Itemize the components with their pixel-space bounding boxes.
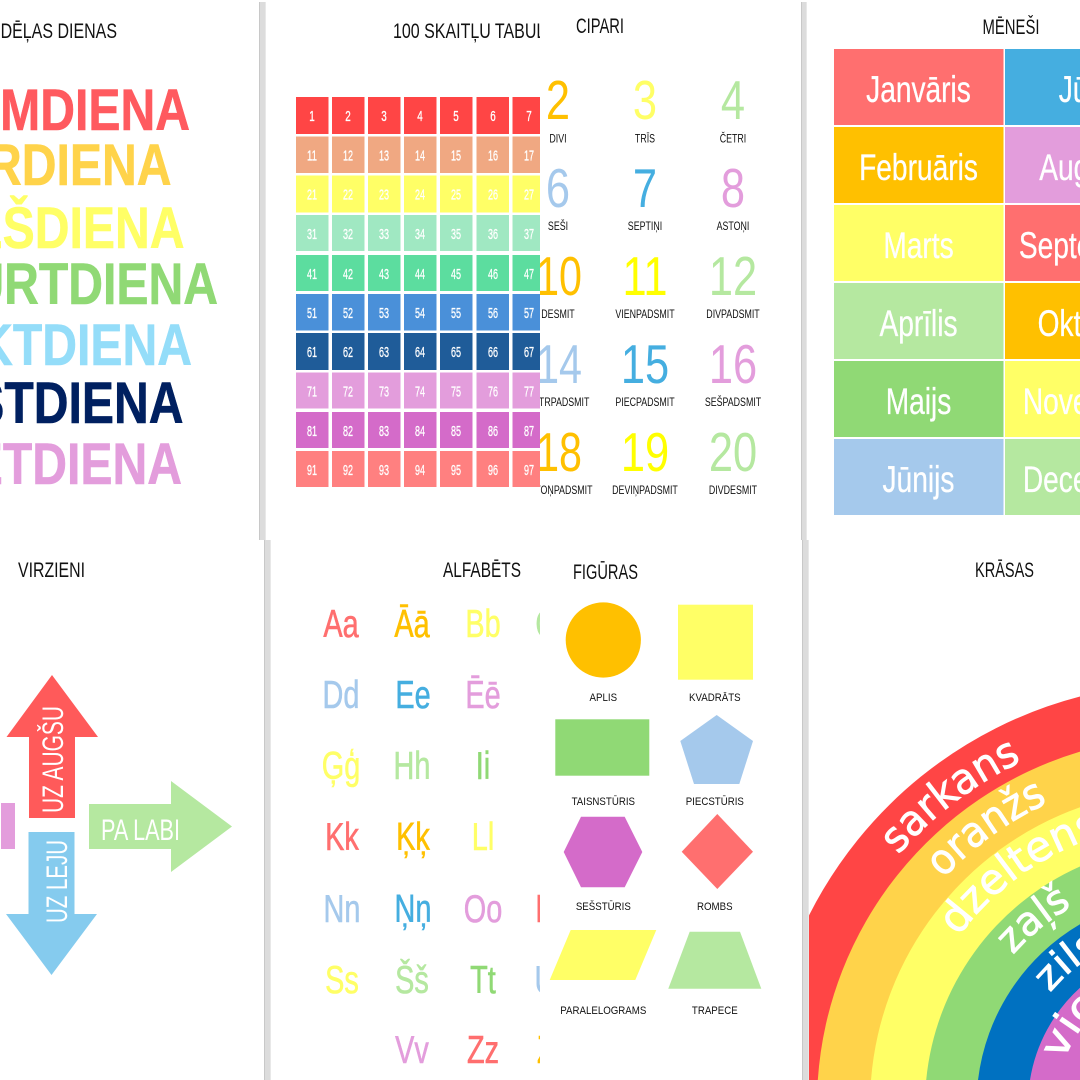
numerals row 2: 8 bbox=[721, 157, 745, 219]
August bbox=[1005, 127, 1080, 203]
letters row 2 bbox=[323, 674, 501, 717]
numerals row 1 bbox=[546, 69, 746, 146]
row 2: 17 bbox=[524, 148, 534, 164]
row 1: 1 bbox=[309, 109, 315, 125]
numerals row 5: 20 bbox=[709, 421, 757, 483]
row 3: 26 bbox=[488, 188, 498, 204]
panel: months bbox=[807, 0, 1080, 540]
letters row 2: Ēē bbox=[465, 674, 501, 717]
letters row 6: Ss bbox=[325, 959, 359, 1002]
numerals row 3: VIENPADSMIT bbox=[615, 309, 675, 321]
numerals row 3: DESMIT bbox=[541, 309, 575, 321]
letters row 1: Aa bbox=[323, 603, 359, 646]
arrow: right: PA LABI bbox=[101, 814, 180, 847]
row 4: 37 bbox=[524, 227, 534, 243]
row 9: 85 bbox=[451, 424, 461, 440]
row 10: 95 bbox=[451, 463, 461, 479]
row 10 bbox=[296, 451, 540, 487]
panel: shapes bbox=[540, 540, 801, 1080]
July bbox=[1005, 49, 1080, 125]
shape: pentagon: PIECSTŪRIS bbox=[686, 795, 744, 808]
arrow: down bbox=[6, 832, 97, 975]
month table bbox=[834, 49, 1080, 515]
row 5: 43 bbox=[379, 267, 389, 283]
row 5: 44 bbox=[415, 267, 425, 283]
row 6: 56 bbox=[488, 306, 498, 322]
numerals row 2: SEŠI bbox=[548, 219, 568, 233]
row 7: 63 bbox=[379, 345, 389, 361]
row 6: 54 bbox=[415, 306, 425, 322]
rainbow bbox=[809, 696, 1080, 1080]
numerals row 5: 19 bbox=[621, 421, 669, 483]
row 9: 86 bbox=[488, 424, 498, 440]
numerals row 1: ČETRI bbox=[720, 131, 746, 146]
row 8: 72 bbox=[343, 384, 353, 400]
row 5 bbox=[296, 255, 540, 291]
letters row 1: Āā bbox=[394, 603, 430, 646]
February: Februāris bbox=[859, 146, 978, 188]
row 10: 92 bbox=[343, 463, 353, 479]
letters row 4: Ll bbox=[472, 816, 494, 859]
row 8: 74 bbox=[415, 384, 425, 400]
label: green: zaļš bbox=[998, 880, 1069, 954]
heading: directions: VIRZIENI bbox=[18, 559, 85, 582]
November bbox=[1005, 361, 1080, 437]
row 4: 31 bbox=[307, 227, 317, 243]
row 4: 36 bbox=[488, 227, 498, 243]
row 6 bbox=[296, 294, 540, 330]
row 10: 91 bbox=[307, 463, 317, 479]
numerals row 3: 12 bbox=[709, 245, 757, 307]
letters row 4: Kk bbox=[325, 816, 360, 859]
panel: alphabet bbox=[271, 540, 540, 1080]
row 6: 51 bbox=[307, 306, 317, 322]
numerals row 1: TRĪS bbox=[635, 132, 655, 146]
shape: trapezoid: TRAPECE bbox=[692, 1004, 738, 1017]
panel: numerals bbox=[540, 0, 801, 540]
row 1 bbox=[296, 97, 540, 134]
letters row 3: Ii bbox=[476, 745, 490, 788]
row 1: 4 bbox=[417, 109, 423, 125]
numerals row 5: DEVIŅPADSMIT bbox=[612, 485, 678, 497]
row 2: 12 bbox=[343, 148, 353, 164]
arrow: up bbox=[6, 675, 98, 818]
arrow: left bbox=[1, 803, 15, 849]
row 4: 34 bbox=[415, 227, 425, 243]
letters row 3: Hh bbox=[394, 745, 430, 788]
row 6: 53 bbox=[379, 306, 389, 322]
row 3: 21 bbox=[307, 188, 317, 204]
heading: numerals: CIPARI bbox=[576, 15, 624, 38]
row 2: 11 bbox=[307, 148, 317, 164]
October bbox=[1005, 283, 1080, 359]
row 8: 71 bbox=[307, 384, 317, 400]
row 1: 2 bbox=[345, 109, 351, 125]
row 1: 6 bbox=[490, 109, 496, 125]
panel: colours bbox=[809, 540, 1080, 1080]
shape: rectangle: TAISNSTŪRIS bbox=[572, 795, 635, 808]
row 8: 76 bbox=[488, 384, 498, 400]
row 4: 32 bbox=[343, 227, 353, 243]
shape: square: KVADRĀTS bbox=[689, 691, 741, 704]
shape: parallelogram: PARALELOGRAMS bbox=[560, 1004, 646, 1017]
row 1: 7 bbox=[526, 109, 532, 125]
row 1: 5 bbox=[453, 109, 459, 125]
row 4 bbox=[296, 215, 540, 251]
row 3: 25 bbox=[451, 188, 461, 204]
letters row 7: Vv bbox=[395, 1029, 430, 1072]
May: Maijs bbox=[886, 380, 951, 422]
letters row 6: Šš bbox=[395, 958, 429, 1002]
row 7: 66 bbox=[488, 345, 498, 361]
row 1: 3 bbox=[381, 109, 387, 125]
numerals row 2 bbox=[546, 157, 749, 233]
row 4: 33 bbox=[379, 227, 389, 243]
numerals row 4: SEŠPADSMIT bbox=[705, 395, 762, 409]
row 10: 97 bbox=[524, 463, 534, 479]
row 2: 14 bbox=[415, 148, 425, 164]
shape: pentagon bbox=[680, 715, 753, 808]
numerals row 4: PIECPADSMIT bbox=[615, 397, 675, 409]
September bbox=[1005, 205, 1080, 281]
numerals row 4 bbox=[527, 333, 762, 409]
panel: weekdays bbox=[0, 0, 259, 540]
January: Janvāris bbox=[866, 68, 971, 110]
numerals row 3: DIVPADSMIT bbox=[706, 309, 760, 321]
numerals row 5 bbox=[524, 421, 758, 497]
numerals row 1: 4 bbox=[721, 69, 745, 131]
numerals row 3: 11 bbox=[622, 245, 668, 307]
June bbox=[834, 439, 1004, 515]
heading: colours: KRĀSAS bbox=[975, 559, 1034, 582]
numerals row 2: SEPTIŅI bbox=[628, 221, 662, 233]
February bbox=[834, 127, 1004, 203]
row 10: 96 bbox=[488, 463, 498, 479]
letters row 1 bbox=[323, 603, 571, 646]
row 5: 41 bbox=[307, 267, 317, 283]
letters row 6: Tt bbox=[470, 959, 496, 1002]
April bbox=[834, 283, 1004, 359]
letters row 3 bbox=[322, 745, 490, 788]
heading: shapes: FIGŪRAS bbox=[573, 561, 638, 584]
letters row 6 bbox=[325, 958, 571, 1002]
March: Marts bbox=[883, 224, 954, 266]
row 3: 23 bbox=[379, 188, 389, 204]
row 2: 13 bbox=[379, 148, 389, 164]
row 10: 93 bbox=[379, 463, 389, 479]
April: Aprīlis bbox=[879, 302, 958, 344]
row 10: 94 bbox=[415, 463, 425, 479]
row 6: 52 bbox=[343, 306, 353, 322]
shape: rhombus bbox=[682, 814, 753, 913]
March bbox=[834, 205, 1004, 281]
shape: hexagon: SEŠSTŪRIS bbox=[576, 899, 631, 913]
row 7: 62 bbox=[343, 345, 353, 361]
row 6: 57 bbox=[524, 306, 534, 322]
row 8: 73 bbox=[379, 384, 389, 400]
letters row 7 bbox=[395, 1028, 569, 1072]
letters row 7: Zz bbox=[467, 1029, 499, 1072]
row 9: 82 bbox=[343, 424, 353, 440]
numerals row 2: ASTOŅI bbox=[717, 221, 749, 233]
numerals row 2: 6 bbox=[546, 157, 570, 219]
shape: circle: APLIS bbox=[590, 691, 617, 704]
row 8: 75 bbox=[451, 384, 461, 400]
shape: hexagon bbox=[564, 817, 642, 913]
numerals row 4: 16 bbox=[709, 333, 757, 395]
row 5: 47 bbox=[524, 267, 534, 283]
numerals row 1: 2 bbox=[546, 69, 570, 131]
row 7: 67 bbox=[524, 345, 534, 361]
row 7: 64 bbox=[415, 345, 425, 361]
row 9 bbox=[296, 412, 540, 448]
December bbox=[1005, 439, 1080, 515]
letters row 4 bbox=[325, 816, 494, 859]
letters row 2: Ee bbox=[395, 674, 431, 717]
numerals row 1: DIVI bbox=[549, 134, 567, 146]
row 2: 15 bbox=[451, 148, 461, 164]
row 9: 84 bbox=[415, 424, 425, 440]
arrow: right bbox=[89, 781, 232, 872]
shape: rhombus: ROMBS bbox=[697, 900, 733, 913]
numerals row 1: 3 bbox=[633, 69, 657, 131]
letters row 3: Ģģ bbox=[322, 745, 360, 788]
shape: trapezoid bbox=[668, 932, 761, 1017]
row 5: 46 bbox=[488, 267, 498, 283]
row 3: 22 bbox=[343, 188, 353, 204]
label: orange: oranžs bbox=[932, 784, 1044, 874]
label: red: sarkans bbox=[884, 742, 1018, 854]
letters row 5: Nn bbox=[324, 888, 360, 931]
panel: 100 number table bbox=[266, 0, 540, 540]
January bbox=[834, 49, 1004, 125]
row 9: 83 bbox=[379, 424, 389, 440]
row 7 bbox=[296, 333, 540, 370]
row 8 bbox=[296, 372, 540, 408]
row 5: 42 bbox=[343, 267, 353, 283]
shape: rectangle bbox=[555, 719, 649, 808]
row 2 bbox=[296, 136, 540, 173]
row 5: 45 bbox=[451, 267, 461, 283]
letters row 5 bbox=[324, 888, 571, 931]
row 3: 24 bbox=[415, 188, 425, 204]
weekday list bbox=[0, 79, 218, 497]
numerals row 3 bbox=[536, 245, 760, 321]
row 3: 27 bbox=[524, 188, 534, 204]
numerals row 5: DIVDESMIT bbox=[709, 485, 758, 497]
row 3 bbox=[296, 176, 540, 212]
shape: circle bbox=[566, 602, 641, 704]
numerals row 2: 7 bbox=[633, 157, 657, 219]
letters row 2: Dd bbox=[323, 674, 359, 717]
row 2: 16 bbox=[488, 148, 498, 164]
letters row 4: Ķķ bbox=[396, 816, 431, 859]
row 4: 35 bbox=[451, 227, 461, 243]
heading: months: MĒNEŠI bbox=[982, 16, 1040, 39]
shape: square bbox=[678, 605, 753, 704]
numerals row 4: 15 bbox=[621, 333, 669, 395]
row 9: 81 bbox=[307, 424, 317, 440]
number grid bbox=[296, 97, 540, 487]
row 8: 77 bbox=[524, 384, 534, 400]
shape: parallelogram bbox=[550, 930, 656, 1017]
letters row 1: Bb bbox=[465, 603, 501, 646]
May bbox=[834, 361, 1004, 437]
letters row 5: Oo bbox=[464, 888, 502, 931]
arrow: up: UZ AUGŠU bbox=[36, 706, 70, 813]
arrow: down: UZ LEJU bbox=[41, 840, 74, 923]
row 7: 65 bbox=[451, 345, 461, 361]
letters row 5: Ņņ bbox=[395, 888, 431, 931]
row 7: 61 bbox=[307, 345, 317, 361]
row 9: 87 bbox=[524, 424, 534, 440]
row 6: 55 bbox=[451, 306, 461, 322]
panel: directions bbox=[0, 540, 264, 1080]
June: Jūnijs bbox=[883, 458, 954, 500]
